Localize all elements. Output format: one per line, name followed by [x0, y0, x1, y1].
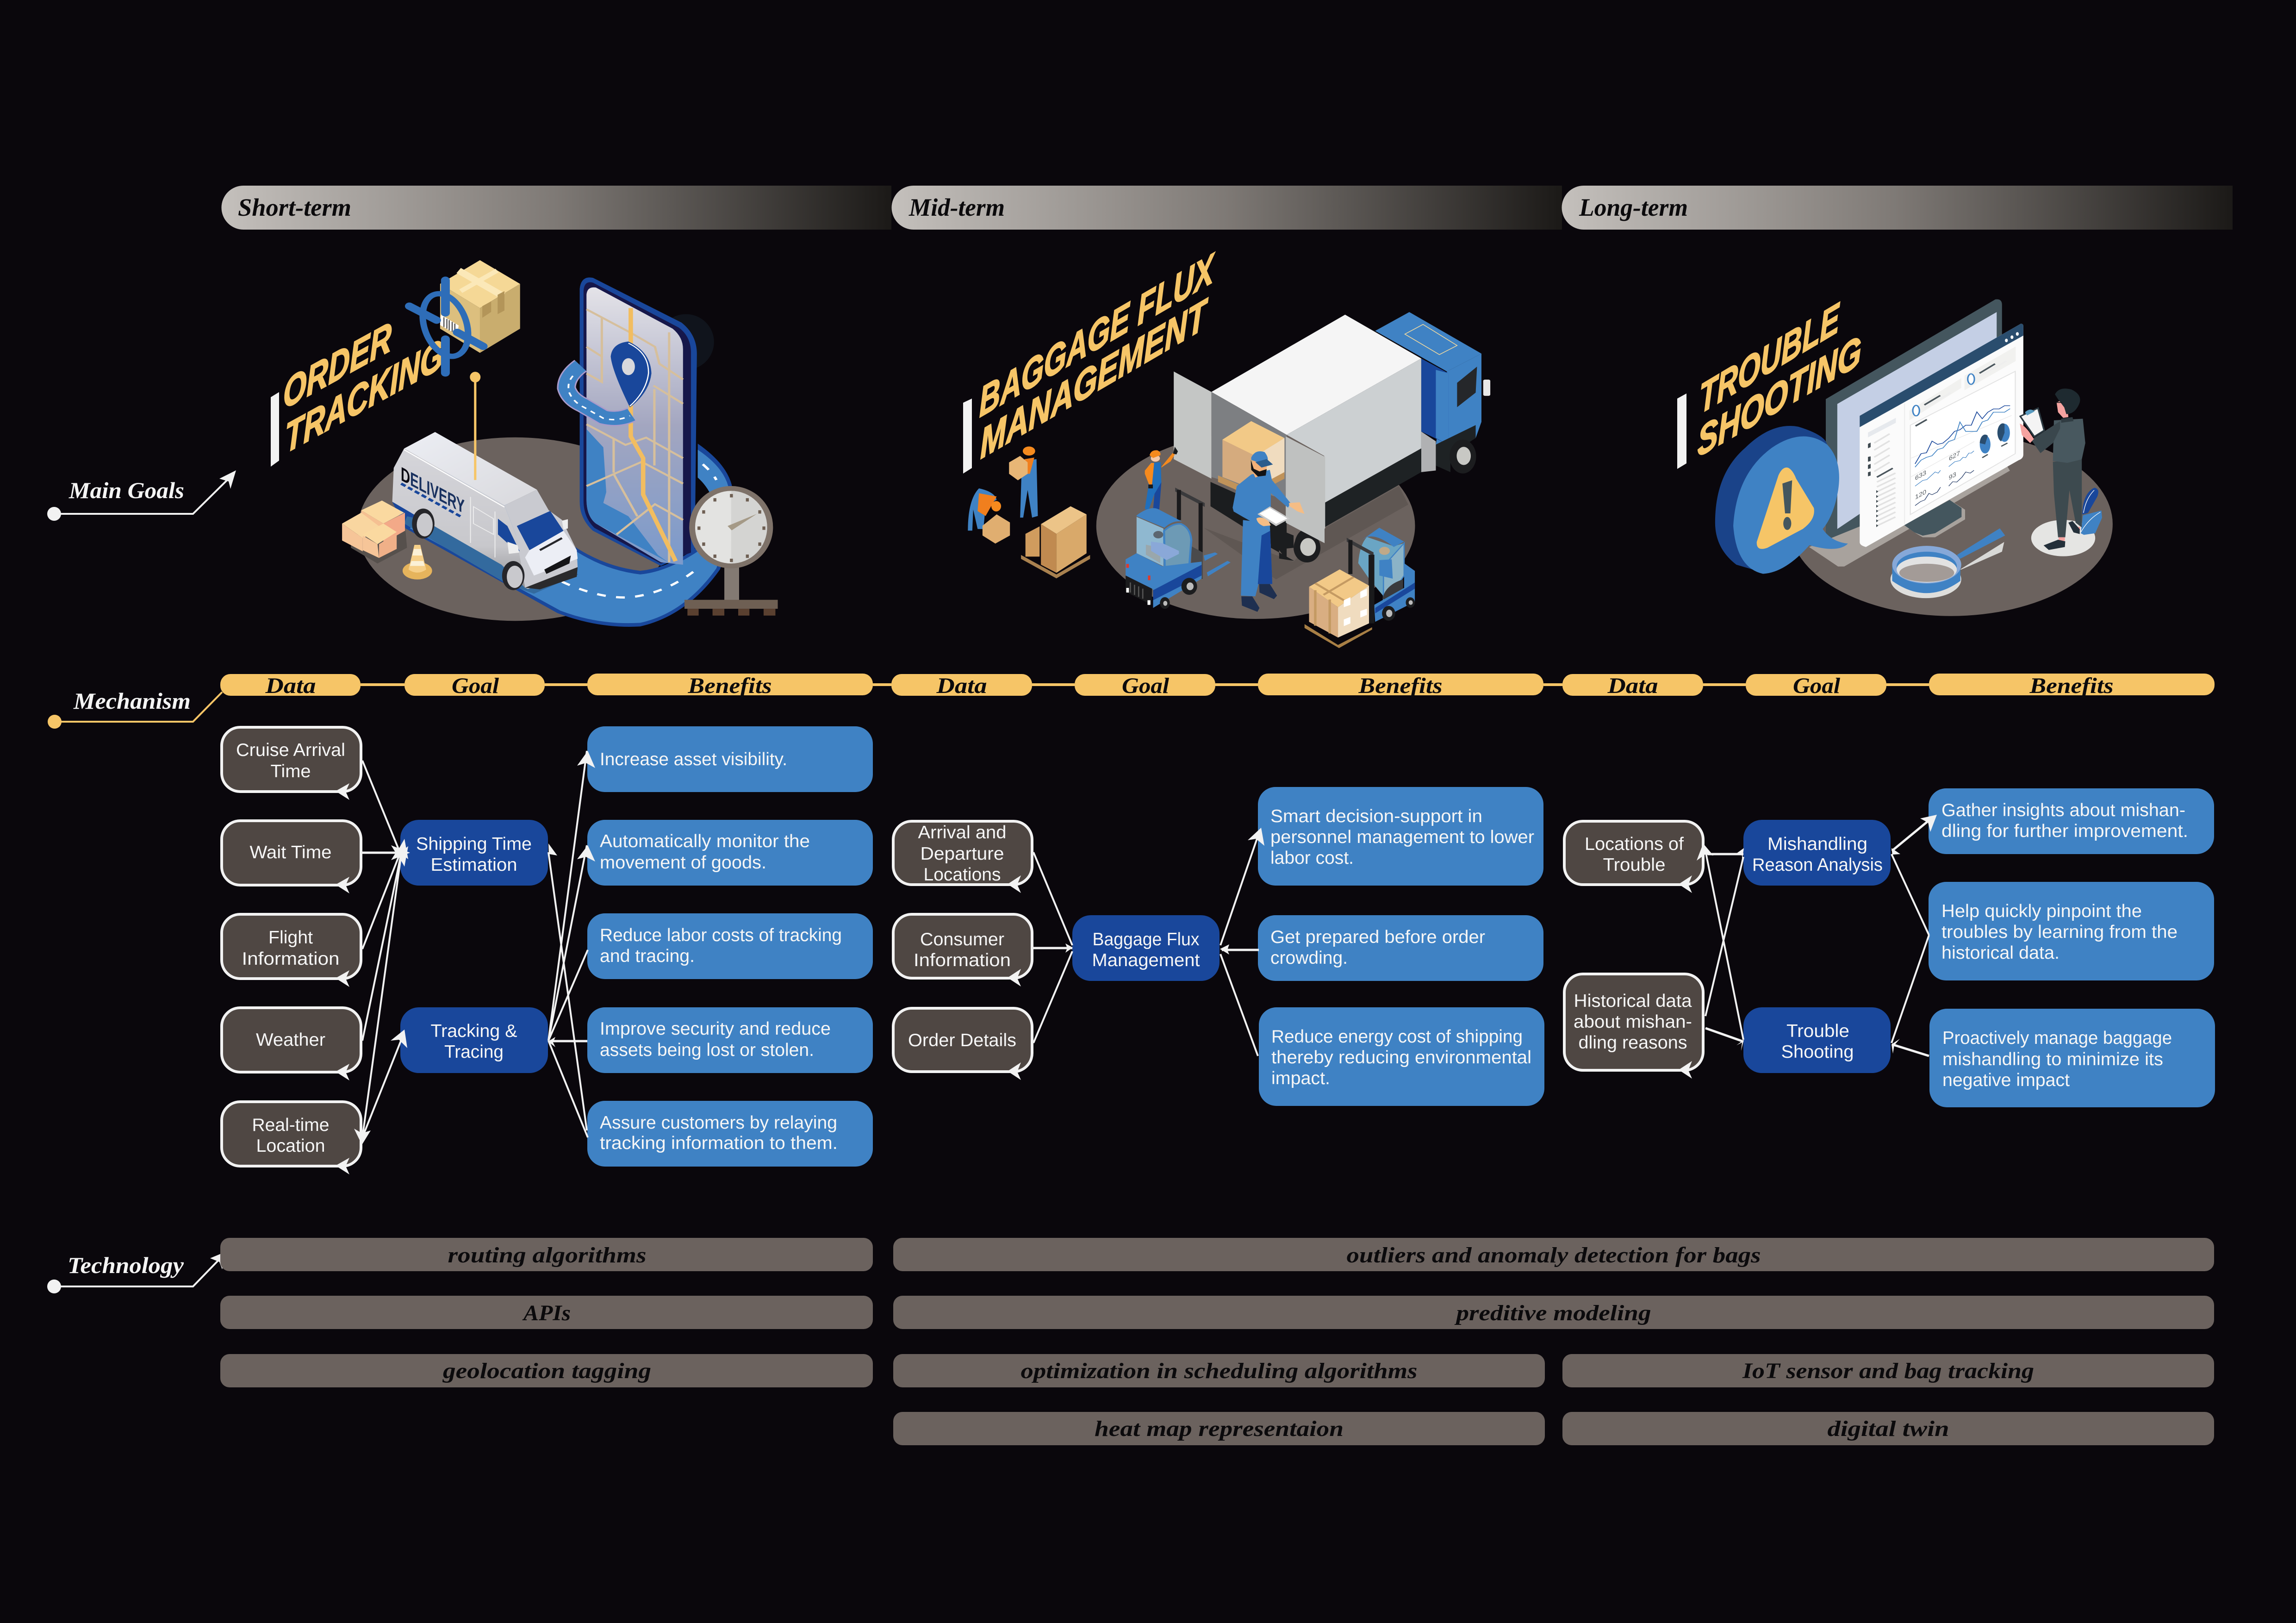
- pills: long-term columns: Benefits: [2029, 674, 2113, 698]
- benefit boxes: mid-term: [1258, 787, 1544, 1106]
- illustration: order tracking: [342, 260, 778, 627]
- phase header: long-term: [1562, 186, 2233, 230]
- dashboard window: [1860, 324, 2023, 547]
- section label: mechanism: [48, 688, 222, 729]
- phase header: short-term: [221, 186, 891, 230]
- title: trouble shooting: TROUBLE: [1699, 293, 1840, 423]
- benefit boxes: short-term: Reduce labor costs of tracking: [600, 925, 842, 945]
- benefit boxes: mid-term: crowding.: [1270, 948, 1348, 968]
- benefit boxes: mid-term: Get prepared before order: [1270, 927, 1485, 947]
- phase header: mid-term: Mid-term: [908, 194, 1005, 221]
- goal boxes: short-term: Estimation: [430, 855, 517, 875]
- technology bars: short-term: routing algorithms: [448, 1243, 646, 1267]
- benefit boxes: short-term: Increase asset visibility.: [600, 749, 787, 769]
- goal boxes: short-term: Tracing: [444, 1042, 504, 1062]
- data boxes: mid-term: Information: [914, 950, 1011, 970]
- title: trouble shooting: [1677, 293, 1861, 469]
- stacked small parcels: [342, 500, 407, 563]
- ground ellipse: [1096, 432, 1415, 619]
- alert speech bubble: [1715, 426, 1848, 574]
- data boxes: long-term: Historical data: [1574, 991, 1692, 1011]
- dashboard window: 93: [1949, 471, 1956, 482]
- benefit boxes: long-term: Help quickly pinpoint the: [1941, 901, 2142, 921]
- pills: long-term columns: [1562, 674, 2215, 698]
- person with clipboard: [2020, 388, 2085, 550]
- technology bars: mid and long-term: preditive modeling: [1454, 1301, 1651, 1325]
- shadow behind phone: [658, 314, 714, 370]
- benefit boxes: mid-term: labor cost.: [1270, 848, 1354, 868]
- pills: long-term columns: Data: [1607, 674, 1658, 698]
- floor shadow: [1204, 486, 1408, 580]
- technology bars: short-term: [220, 1238, 873, 1387]
- benefit boxes: long-term: Gather insights about mishan-: [1941, 800, 2185, 820]
- forklift left: [1126, 487, 1231, 609]
- goal boxes: long-term: Reason Analysis: [1752, 855, 1883, 875]
- benefit boxes: short-term: [587, 726, 873, 1167]
- benefit boxes: long-term: [1929, 788, 2215, 1107]
- title: order tracking: TRACKING: [285, 330, 443, 463]
- data boxes: short-term: Time: [270, 762, 311, 781]
- benefit boxes: mid-term: Smart decision-support in: [1270, 806, 1482, 826]
- truck rear wheel: [1271, 440, 1325, 562]
- technology bars: mid-term: [893, 1354, 1545, 1445]
- data boxes: long-term: Trouble: [1603, 855, 1665, 875]
- pills: short-term columns: [220, 674, 873, 698]
- technology bars: long-term: [1562, 1354, 2214, 1445]
- data boxes: short-term: Information: [242, 949, 340, 969]
- title: order tracking: [271, 313, 443, 467]
- data boxes: mid-term: Locations: [924, 865, 1001, 885]
- data boxes: long-term: [1564, 821, 1703, 1079]
- benefit boxes: long-term: Proactively manage baggage: [1942, 1028, 2172, 1048]
- pills: mid-term columns: [891, 674, 1543, 698]
- section label: main goals: [47, 470, 236, 521]
- gauge: [684, 486, 778, 616]
- parcel top: [440, 260, 520, 353]
- data boxes: short-term: Cruise Arrival: [236, 740, 345, 760]
- worker bending: [968, 488, 1010, 543]
- data boxes: short-term: Wait Time: [250, 843, 331, 862]
- pills: mid-term columns: Data: [936, 674, 987, 698]
- supervisor with tablet: [1232, 451, 1305, 612]
- benefit boxes: mid-term: Reduce energy cost of shipping: [1271, 1027, 1523, 1047]
- target crosshair: [410, 280, 483, 373]
- dashboard window: 633: [1915, 469, 1926, 482]
- road: [392, 443, 733, 627]
- goal box: mid-term: [1072, 915, 1220, 981]
- data boxes: short-term: Real-time: [252, 1115, 330, 1135]
- floor disc: [2031, 520, 2095, 556]
- data boxes: mid-term: Order Details: [908, 1030, 1016, 1050]
- benefit boxes: short-term: Assure customers by relaying: [600, 1113, 837, 1133]
- phase header: long-term: Long-term: [1579, 194, 1688, 221]
- phone: [566, 277, 697, 566]
- technology bars: long-term: IoT sensor and bag tracking: [1742, 1359, 2034, 1383]
- pickup line: [470, 372, 480, 480]
- title: baggage flux management: BAGGAGE FLUX: [979, 243, 1215, 426]
- data boxes: long-term: dling reasons: [1578, 1033, 1687, 1053]
- goal box: mid-term: Management: [1092, 950, 1200, 970]
- section label: main goals: Main Goals: [68, 477, 184, 503]
- benefit boxes: short-term: tracking information to them.: [600, 1133, 838, 1153]
- benefit boxes: short-term: Improve security and reduce: [600, 1019, 831, 1039]
- pills: mid-term columns: Benefits: [1358, 674, 1442, 698]
- title: baggage flux management: MANAGEMENT: [980, 288, 1208, 468]
- ground ellipse: [358, 437, 672, 621]
- worker signalling: [1145, 447, 1178, 509]
- goal boxes: short-term: Shipping Time: [416, 834, 532, 854]
- technology bars: short-term: geolocation tagging: [442, 1359, 651, 1383]
- plant: [2081, 488, 2102, 535]
- goal box: mid-term: Baggage Flux: [1092, 930, 1200, 949]
- benefit boxes: long-term: mishandling to minimize its: [1942, 1049, 2163, 1069]
- data boxes: mid-term: Arrival and: [918, 823, 1006, 843]
- data boxes: short-term: Weather: [256, 1030, 325, 1050]
- benefit boxes: long-term: negative impact: [1942, 1070, 2070, 1090]
- goal boxes: long-term: Trouble: [1786, 1021, 1849, 1041]
- monitor: [1826, 299, 2002, 545]
- illustration: baggage flux management: [968, 312, 1490, 648]
- benefit boxes: short-term: Automatically monitor the: [600, 831, 810, 851]
- pills: mid-term columns: Goal: [1122, 674, 1170, 698]
- title: trouble shooting: SHOOTING: [1698, 326, 1861, 466]
- technology bars: short-term: APIs: [522, 1301, 571, 1325]
- pills: short-term columns: Goal: [452, 674, 499, 698]
- monitor shadow and stand: [1809, 467, 2010, 567]
- technology bars: mid-term: optimization in scheduling algorithms: [1021, 1359, 1417, 1383]
- ground ellipse: [1790, 432, 2113, 616]
- benefit boxes: mid-term: impact.: [1271, 1068, 1330, 1088]
- section label: mechanism: Mechanism: [73, 688, 191, 714]
- label: van lettering: DELIVERY: [401, 462, 465, 518]
- technology bars: mid-term: heat map representaion: [1095, 1417, 1344, 1441]
- benefit boxes: mid-term: personnel management to lower: [1270, 827, 1534, 847]
- magnifying glass: [1891, 528, 2005, 598]
- benefit boxes: short-term: movement of goods.: [600, 853, 766, 873]
- goal boxes: long-term: Shooting: [1781, 1042, 1854, 1062]
- data boxes: mid-term: [893, 821, 1032, 1080]
- traffic cone: [403, 545, 432, 580]
- data boxes: long-term: Locations of: [1585, 834, 1684, 854]
- dashboard window: 120: [1915, 488, 1926, 501]
- benefit boxes: short-term: assets being lost or stolen.: [600, 1040, 814, 1060]
- worker carrying parcel: [1009, 447, 1038, 518]
- delivery van: [392, 432, 578, 590]
- arrows: long-term: [1697, 815, 1937, 1056]
- phase header: mid-term: [891, 186, 1562, 230]
- arrows: mid-term: [1033, 828, 1264, 1056]
- benefit boxes: long-term: dling for further improvement.: [1941, 821, 2188, 841]
- pill connector lines: [361, 683, 1929, 686]
- data boxes: short-term: [222, 727, 361, 1174]
- benefit boxes: mid-term: thereby reducing environmental: [1271, 1048, 1531, 1067]
- data boxes: long-term: about mishan-: [1574, 1012, 1692, 1032]
- data boxes: mid-term: Departure: [920, 844, 1004, 864]
- pills: short-term columns: Data: [265, 674, 316, 698]
- goal boxes: short-term: Tracking &: [430, 1021, 517, 1041]
- technology bars: long-term: digital twin: [1827, 1417, 1949, 1441]
- technology bars: mid and long-term: [893, 1238, 2214, 1329]
- data boxes: short-term: Location: [256, 1136, 325, 1156]
- technology bars: mid and long-term: outliers and anomaly detection for bags: [1347, 1243, 1761, 1267]
- illustration: trouble shooting: [1715, 299, 2113, 616]
- section label: technology: [47, 1251, 227, 1293]
- truck: [1174, 312, 1490, 562]
- pallet stack left: [1021, 506, 1090, 578]
- data boxes: short-term: Flight: [268, 928, 313, 948]
- title: order tracking: ORDER: [283, 313, 392, 419]
- goal boxes: long-term: [1743, 820, 1891, 1073]
- benefit boxes: short-term: and tracing.: [600, 946, 695, 966]
- pills: short-term columns: Benefits: [687, 674, 772, 698]
- section label: technology: Technology: [68, 1252, 184, 1278]
- forklift right with pallet: [1305, 528, 1415, 648]
- pills: long-term columns: Goal: [1793, 674, 1841, 698]
- goal boxes: short-term: [400, 820, 548, 1073]
- data boxes: mid-term: Consumer: [920, 930, 1004, 949]
- goal boxes: long-term: Mishandling: [1767, 834, 1867, 854]
- benefit boxes: long-term: troubles by learning from the: [1941, 922, 2178, 942]
- phase header: short-term: Short-term: [238, 194, 351, 221]
- dashboard window: 627: [1949, 449, 1960, 462]
- benefit boxes: long-term: historical data.: [1941, 943, 2060, 963]
- arrows: short-term: [354, 751, 595, 1145]
